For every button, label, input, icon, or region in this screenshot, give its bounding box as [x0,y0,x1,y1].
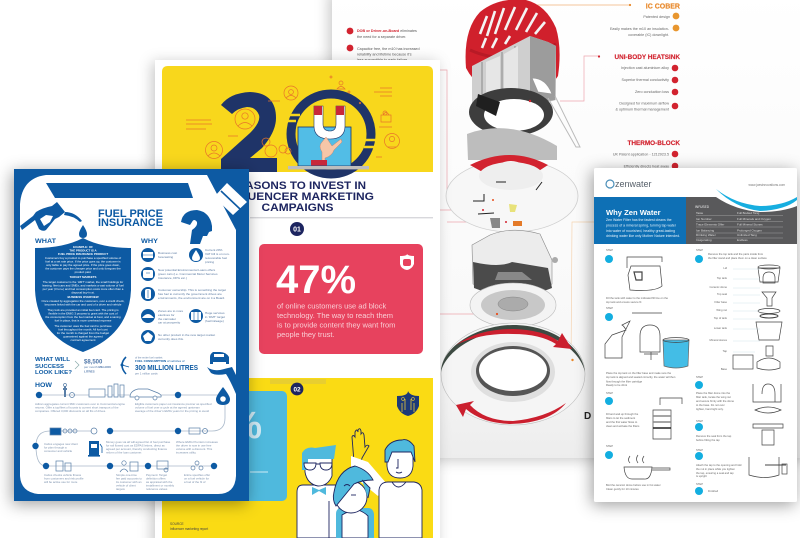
illustration: right man [379,440,422,538]
list: why icons and reasons: Insurance, DPIs etc.) [158,276,187,280]
panel: what shield: becomes linked with the car and card of a driver and vehicle [45,302,122,306]
panel: 47% statistic [259,244,423,354]
small instruction text: Fill the tank with water to the indicated fill line on the [606,296,669,300]
step descriptions: average of the driver’s EMIG years for the pricing to avoid [135,409,209,413]
panel: 47% statistic: 47% [276,258,356,302]
stat: 300 million litres: of the entire fuel market: [135,356,163,360]
panel: what shield: The customer uses the fuel card to purchase [54,324,112,328]
panel: what shield: flexible in the EMIG 3 process to grant with the cost of [48,312,118,316]
stat: monthly value: LITRES [84,370,95,374]
list: why icons and reasons: currently does this. [158,337,184,341]
heading: uni-body heatsink: Zero conduction loss [635,90,669,94]
heading: what: WHAT [35,239,56,245]
shape: white jerry can [20,175,236,494]
small instruction text: Wing nut [716,308,727,312]
panel: grey spec table: Trace Elements Offer [696,222,724,226]
icon: fuel pump [88,441,102,457]
small instruction text: STEP [696,482,703,486]
heading: 20 reasons title: CAMPAIGNS [262,202,334,214]
step descriptions: for rail flowed cost as EDPAS letters, direct as [106,444,165,448]
panel: grey spec table: Unlimited Tang [737,233,757,237]
list: why icons and reasons: car at prosperity [158,320,181,324]
panel: what shield: leasing, fleet cars and SMEs, and markets a vast volume of fuel [42,284,124,288]
small instruction text: Top tank [717,276,728,280]
icon: question mark head [181,210,212,244]
text: driver benefits: reliability and lifetime because it's [357,52,412,56]
illustration: centre woman [333,466,374,538]
icon: ad block shield [400,254,414,270]
panel: fuel price insurance document [14,169,249,501]
small instruction text: STEP [606,444,613,448]
illustration: boiling pan step 4 [624,455,670,479]
small instruction text: before fitting the tap [696,438,720,442]
header: Why Zen Water [594,197,686,244]
small instruction text: Filter base [714,300,728,304]
small instruction text: Place the top tank on the filter base and make sure the [606,371,672,375]
text: driver benefits: less susceptible to early failure [357,58,407,62]
panel: grey spec table: Ion Balancing [696,228,715,232]
illustration: lens plate [470,283,556,327]
heading: thermo-block: THERMO-BLOCK [627,140,680,147]
header: Why Zen Water: Why Zen Water [606,208,661,217]
panel: 47% statistic: technology. The way to reach them [277,311,393,320]
panel: what shield: fuel in place, that is more overhead expense [55,318,112,322]
step descriptions: Carlos engages new client [44,442,78,446]
icon: laptop with magnet and hand [288,106,369,169]
list: why icons and reasons: Business cost [158,251,177,255]
heading: thermo-block [613,140,680,169]
small instruction text: Top seal [717,292,727,296]
heading: uni-body heatsink: UNI-BODY HEATSINK [615,54,680,61]
heading: IC cober: IC COBER [646,4,680,10]
step descriptions: companies. Offered 3,000 discounts on all fits of drives. [35,409,106,413]
step descriptions: agreed per account, thereby conducting finance [106,447,167,451]
small instruction text: top tank and ensure secure fit [606,300,642,304]
small instruction text: Remove the top tank and the parts inside from [708,252,764,256]
list: why icons and reasons: environments, the environment are on it a Board. [158,296,225,300]
step descriptions: volume of fuel over a cycle at the agreed upstream [135,406,201,410]
stat: 300 million litres: per 1 million cards [135,372,158,376]
heading: why: WHY [141,239,158,245]
small instruction text: Place the filter dome into the [696,391,731,395]
small instruction text: STEP [606,248,613,252]
source note: Influencer marketing report [170,527,208,531]
heading: thermo-block: UK Patent application - 1212923.5 [613,152,669,156]
panel: grey spec table: Ion Number [696,217,712,221]
panel: what shield: disposal buy-in at. [71,290,95,294]
small instruction text: STEP [696,419,703,423]
small instruction text: flow through the filter cartridge [606,380,643,384]
small instruction text: STEP [696,448,703,452]
illustration: filter stack step 3 [653,398,682,439]
icon: car on hand [207,352,236,394]
small instruction text: the tap, ensuring a seal and tap [696,471,734,475]
panel: what shield: guaranteed against the agreed [63,334,103,338]
text: driver benefits: DOB or Driver-on-Board eliminates [357,29,417,33]
header: Why Zen Water: into water of nourished, healthy great-tasting [606,229,675,233]
stat: 300 million litres: FUEL CONSUMPTION of vehicles of [135,359,185,363]
step descriptions: consumer and vehicle [44,449,73,453]
heading: what will success look like: SUCCESS [35,364,64,370]
panel: grey spec table: Prolonged Oxygen [737,228,762,232]
panel: what shield: fuel at a set rate price. If the price goes up, the customer is [45,260,121,264]
small instruction text: Remove the seal from the tap [696,434,732,438]
step descriptions: as appraisal with the [146,480,173,484]
panel: Zen Water document [594,168,797,502]
illustration: tank assembly step 2 [605,313,689,368]
step descriptions: on a fuel vehicle for [184,476,209,480]
list: why icons and reasons [141,248,230,344]
small instruction text: top tank is aligned and seated correctly, the water will then [606,375,676,379]
heading: 20 reasons title: REASONS TO INVEST IN [229,180,366,192]
small instruction text: the filter stand and place them on a clean surface [708,256,767,260]
small instruction text: the nut in place while you tighten [696,467,736,471]
small instruction text: Clean gently for 10 minutes [606,487,639,491]
icon: can handle [46,183,193,198]
heading: fuel price insurance [98,208,163,229]
header: Why Zen Water: Zen Water Filter has the fastest cleans the [606,218,672,222]
panel: what shield: only liable to pay the agreed price. If the price goes down, [46,263,120,267]
illustration: filter parts exploded [733,265,787,478]
heading: thermo-block: Efficiently directs heat away [624,164,669,168]
panel: grey spec table [686,189,797,244]
step descriptions: reference values [146,487,168,491]
list: why icons and reasons: No other product in the new target market [158,333,215,337]
badge: 02 [291,383,303,395]
step descriptions: Money goes via all will agreed list of fuel purchase [106,440,171,444]
panel: what shield [35,238,131,352]
small instruction text [606,248,767,493]
list: why icons and reasons: in ‘DMT’ target [205,315,225,319]
stat: 300 million litres [120,356,198,376]
icon: team shield [397,391,419,416]
small instruction text: Lower tank [714,326,728,330]
step descriptions: volume with a discount. This [176,447,213,451]
panel: grey spec table: Drinking Water [696,233,716,237]
panel: what shield: per year (3 ton+) and fuel consumption costs more often than a [43,287,124,291]
small instruction text: Base [721,367,727,371]
source note: SOURCE [170,522,184,526]
panel: grey spec table: Endless [737,238,748,242]
panel: what shield: Customers buy a product to purchase a specified volume of [45,256,121,260]
logo: zenwater [606,179,785,189]
icon: can cap [214,183,247,215]
step descriptions: the driver is now in use free [176,444,212,448]
small instruction text: and secure firmly with the dome [696,399,734,403]
panel: grey spec table: Full Minerals and Oxygen [737,217,771,221]
heading: IC cober: coverable (IC) downlight. [628,33,669,37]
stat: 300 million litres: 300 MILLION LITRES [135,365,198,372]
panel: blue statistic [160,391,287,501]
step descriptions: Carlos checks vehicle fitness [44,473,82,477]
step descriptions: Adtran aggregates current 3MC customers over to Commercial engine [35,402,125,406]
stat: monthly value [75,360,111,374]
panel: 47% statistic: of online customers use ad block [277,302,386,310]
panel: what shield: THE PRODUCT IS A [69,248,98,252]
panel: what shield: FUEL PRICE INSURANCE PRODUCT [58,252,108,256]
header: yellow banner [162,66,433,174]
heading: what will success look like [35,357,72,376]
panel: 47% statistic: people they trust. [277,330,335,339]
step descriptions: returns. Offer a top/fleet of boosts to current short transport of the [35,406,119,410]
stat: monthly value: $8,500 [84,360,103,366]
list: why icons and reasons: Current 20% [205,248,223,252]
list: why icons and reasons: Huge services [205,311,225,315]
small instruction text: filters to let the sediment [606,416,635,420]
step descriptions: for plan through a [44,446,67,450]
stat: monthly value: per month MILLION [84,365,111,369]
panel: grey spec table: INFUSED [695,205,710,209]
heading: fuel price insurance: INSURANCE [98,217,163,229]
source note [170,522,208,531]
panel: LED downlight exploded diagram [332,0,800,458]
panel: influencer marketing document [155,60,440,538]
step descriptions: installment or monthly [146,484,175,488]
panel: what shield: Once created by aggregation the customers, over a credit check, [42,299,125,303]
heading: how: HOW [35,383,52,389]
step descriptions: Where EMIG Premia’s increases [176,440,218,444]
icon: fuel drop [76,225,90,238]
step nodes [32,392,217,469]
heading: 20 reasons title: INFLUENCER MARKETING [221,191,374,203]
panel: 47% statistic: is to provide content they want from [277,320,395,330]
icon: settings drop [216,387,230,405]
panel: what shield: BUSINESS OVERVIEW [67,295,99,299]
small instruction text: STEP [696,375,703,379]
text: driver benefits: the need for a separate driver. [357,35,406,39]
panel: grey spec table: Full Mineral Stones [737,222,763,226]
small instruction text: STEP [696,248,703,252]
heading: uni-body heatsink: Superior thermal conductivity [621,78,669,82]
step descriptions [35,402,218,491]
small instruction text: Top of tank [714,316,728,320]
header: Why Zen Water: drinking water like only Mother Nature intended. [606,234,680,238]
panel: blue statistic: 76% [186,405,262,447]
step descriptions: Eligible customers paper out insurance premier as specified [135,402,212,406]
step descriptions: vehicle of client [116,484,136,488]
small instruction text: STEP [606,306,613,310]
small instruction text: STEP [606,391,613,395]
heading: uni-body heatsink: Designed for maximum airflow [619,102,669,106]
illustration: red IC cover cage [466,0,560,96]
icon: numeral 0 ring [278,94,382,174]
small instruction text: Finished [708,489,719,493]
panel: what shield: TARGET MARKETS [70,275,96,279]
illustration: left man with glasses [297,445,339,538]
panel: what shield: contract agreement [71,338,96,342]
text: driver benefits [347,28,420,62]
icon: numeral 2 [221,92,277,172]
icons: orange outline influencers [186,76,400,158]
small instruction text: is upright [696,474,707,478]
heading: 20 reasons title [221,180,374,214]
list: why icons and reasons: Customer ownership. This is something the target [158,288,226,292]
heading: uni-body heatsink: Injection cast aluminium alloy [621,66,669,70]
step descriptions: Payment: Target [146,473,167,477]
small instruction text: Ready to be drink [606,383,628,387]
panel: what shield: the customer pays the cheaper price and only foregoes the [45,266,121,270]
panel: what shield: The target customer is the ‘HMT’ market, the small holdings for [43,280,123,284]
step descriptions: Entire specifies offer [184,473,210,477]
step markers [605,255,703,495]
panel: what shield: They lock are provided an initial fuel card. The pricing is [47,308,119,312]
small instruction text: Mineral stones [710,338,728,342]
small instruction text: clean and activate the filters [606,424,640,428]
small instruction text: Fill and wait up through the [606,412,639,416]
panel: what shield: for the month is charged from the budget [57,331,109,335]
panel: what shield: fuel throughout the month. All fuel cost [58,328,108,332]
step descriptions: increases utility. [176,450,197,454]
small instruction text: and the first water flows to [606,420,638,424]
list: why icons and reasons: electives for [158,313,175,317]
panel: grey spec table: Full Bodied Tang [737,211,760,215]
small instruction text: to the base. Do not over [696,403,725,407]
illustration: grey heatsink [472,36,580,147]
step descriptions: fee paid accounts to [116,476,142,480]
panel: what shield: product paid. [75,270,92,274]
chart: how process timeline [32,384,230,491]
heading: fuel price insurance: FUEL PRICE [98,208,163,220]
list: why icons and reasons: green cars (i.e. Commercial Motor Services [158,272,218,276]
callout lines [440,5,630,368]
text: driver benefits: Capacitor free, the m10 has increased [357,47,420,51]
icon: fuel nozzle [20,202,82,231]
illustration: bezel ring with red rotation arrows [441,323,585,425]
letter fragment: D [584,411,591,422]
panel: grey spec table: Invigorating [696,238,712,242]
badge: 01 [290,222,304,236]
heading: uni-body heatsink [598,54,680,112]
small instruction text: Boil the ceramic dome before use in hot water [606,483,661,487]
step descriptions: targets [116,487,125,491]
small instruction text: tighten, hand tight only. [696,407,724,411]
heading: IC cober: Patented design [643,15,670,19]
heading: what will success look like: LOOK LIKE? [35,370,72,376]
panel: grey spec table: Taste [696,211,704,215]
panel: section 02 yellow: 02 [293,387,301,394]
list: why icons and reasons: recoverable fuel [205,256,227,260]
logo: zenwater: www.joesinnovations.com [748,183,785,187]
heading: what will success look like: WHAT WILL [35,357,71,363]
illustration: black mounting ring [469,88,553,136]
list: why icons and reasons: pricing [205,260,214,264]
list: why icons and reasons: has fuel to currently the government drives are [158,292,222,296]
illustration: raised hand [352,429,369,467]
list: why icons and reasons: Zones are to more [158,309,184,313]
small instruction text: Lid [723,266,727,270]
list: why icons and reasons: forecasting [158,255,173,259]
step descriptions: Simple one-time [116,473,137,477]
step descriptions: a fuel of the fit of [184,480,206,484]
list: why icons and reasons: New potential Environmental Loans offers [158,268,216,272]
step descriptions: its customer with an [116,480,142,484]
heading: IC cober: Easily makes the m10 an insulation- [610,27,670,31]
small instruction text: filter tank, locate the wing nut [696,395,731,399]
header: Why Zen Water: process of a mineral spring, turning tap water [606,224,677,228]
heading: uni-body heatsink: & optimum thermal management [616,108,669,112]
badge: 01: 01 [293,227,301,234]
step descriptions: reform of the loan customer. [106,450,142,454]
step descriptions: will be active use for more [44,480,78,484]
panel: what shield: the consumption from the fuel market at best, and a saving [45,315,121,319]
logo: zenwater: zenwater [615,179,652,189]
small instruction text: Attach the tap to the opening and hold [696,463,742,467]
icons: line illustrations [50,384,208,472]
illustration: reflector flange and PCB [446,128,578,232]
illustration: kettle filling step 1 [627,257,662,290]
illustration: thermo-block housing [472,230,558,296]
list: why icons and reasons: (fuel/mileage) [205,319,224,323]
list: why icons and reasons: VAT bill is on non- [205,252,230,256]
small instruction text: Tap [723,349,727,353]
small instruction text: Ceramic dome [710,285,727,289]
heading: IC cober [610,4,680,37]
list: why icons and reasons: the carmaker [158,317,176,321]
step descriptions: definition offers [146,476,166,480]
panel: section 02 yellow [160,378,433,538]
panel: what shield: EXAMPLE: OF [73,245,93,249]
step descriptions: from customers and risk profile [44,476,84,480]
callout lines for filter parts [733,269,760,352]
